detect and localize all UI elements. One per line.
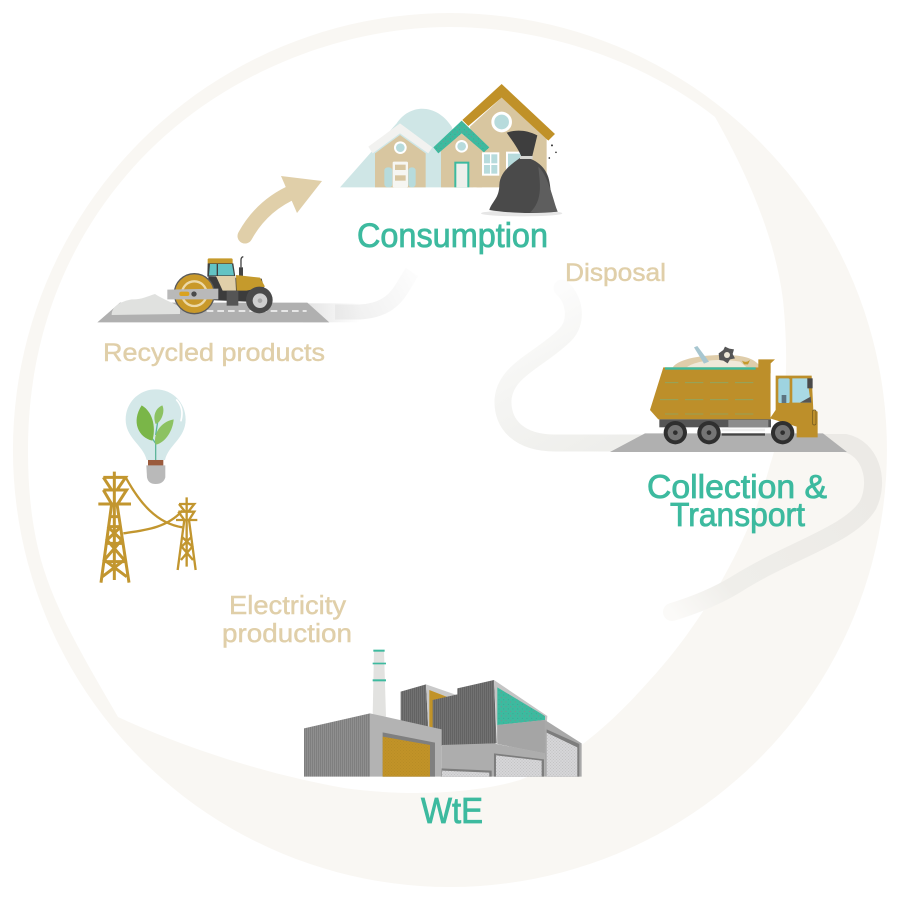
plant xyxy=(137,405,174,460)
icon: light bulb with plant xyxy=(126,389,186,484)
asphalt xyxy=(97,303,329,322)
rear block xyxy=(401,684,457,730)
icon: road roller xyxy=(97,257,360,322)
chimney xyxy=(373,650,386,717)
road: collection to WtE xyxy=(672,443,873,612)
heading: Collection & Transport xyxy=(647,468,827,533)
wheels xyxy=(664,421,794,444)
debris xyxy=(112,294,180,315)
middle house xyxy=(433,121,489,187)
big house xyxy=(462,84,555,187)
roller drum xyxy=(167,274,218,314)
hill xyxy=(340,109,473,187)
left pylon xyxy=(98,472,131,583)
icon: houses and garbage bag xyxy=(340,84,562,216)
asphalt xyxy=(610,433,847,452)
right pylon xyxy=(176,497,197,570)
front block xyxy=(304,713,442,777)
cab xyxy=(207,257,243,277)
label: Electricity production: Electricity xyxy=(229,590,346,620)
icon: waste-to-energy plant xyxy=(304,650,582,777)
cab xyxy=(770,376,818,437)
tipper body xyxy=(650,359,775,419)
big house windows xyxy=(482,152,523,176)
chassis xyxy=(659,419,771,436)
rear wheel xyxy=(246,287,273,313)
trash pile xyxy=(673,346,761,367)
body xyxy=(208,275,265,306)
heading: WtE: WtE xyxy=(421,790,483,831)
road dashes xyxy=(207,308,307,313)
heading: Collection & Transport: Collection & xyxy=(647,468,827,505)
wires xyxy=(123,477,182,533)
right wing xyxy=(545,720,582,777)
road: recycled products to consumption xyxy=(335,272,412,312)
road: collection to consumption xyxy=(503,288,640,443)
arrow: recycled products to consumption xyxy=(245,176,322,236)
label: Electricity production xyxy=(222,590,352,648)
heading: Collection & Transport: Transport xyxy=(670,496,805,533)
icon: electricity pylons xyxy=(98,472,197,583)
teal roof section xyxy=(494,680,547,755)
left house xyxy=(368,123,432,187)
centre block xyxy=(441,743,545,777)
road shoulder xyxy=(303,303,360,322)
icon: garbage truck xyxy=(610,346,847,452)
heading: Consumption: Consumption xyxy=(357,217,548,255)
garbage bag xyxy=(481,131,562,216)
tall block xyxy=(433,680,497,746)
label: Recycled products: Recycled products xyxy=(103,339,325,367)
label: Disposal: Disposal xyxy=(565,259,666,287)
label: Electricity production: production xyxy=(222,618,352,648)
